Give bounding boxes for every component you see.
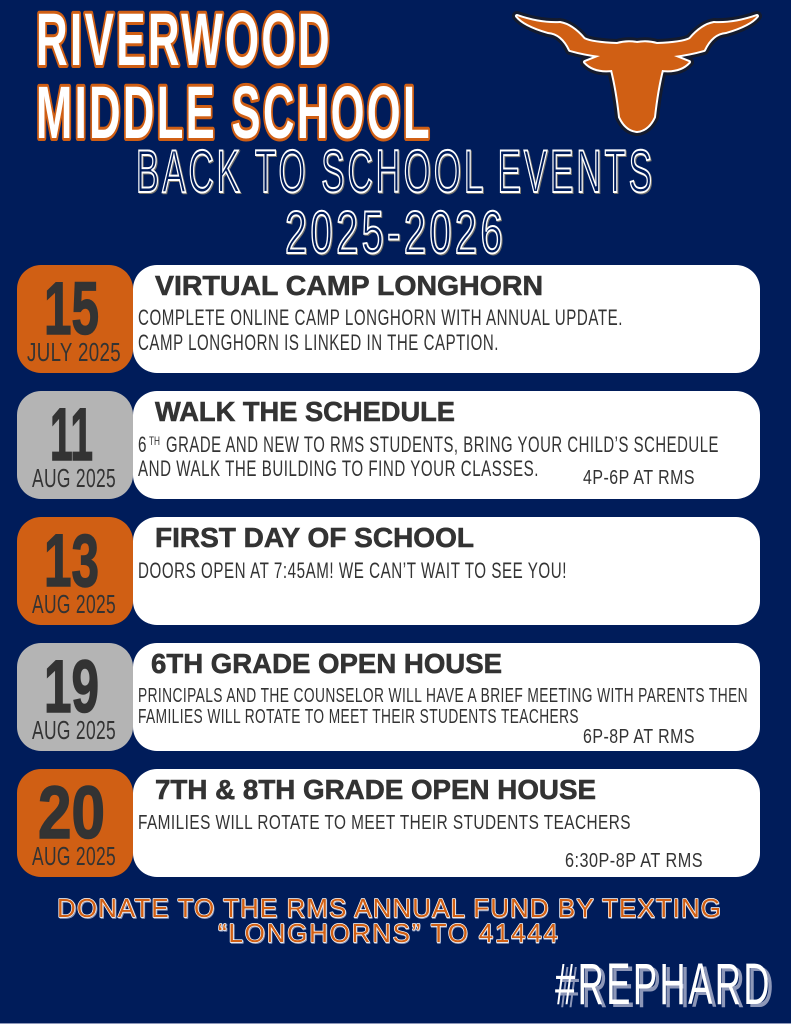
- panel: virtual camp longhorn: VIRTUAL CAMP LONGHORN: [155, 270, 543, 301]
- panel: first day of school: FIRST DAY OF SCHOOL: [155, 522, 474, 553]
- panel: 7th and 8th grade open house: [17, 769, 760, 877]
- panel: first day of school: DOORS OPEN AT 7:45AM! WE CAN’T WAIT TO SEE YOU!: [138, 558, 567, 583]
- panel: 7th and 8th grade open house: FAMILIES WILL ROTATE TO MEET THEIR STUDENTS TEACHERS: [138, 812, 631, 834]
- panel: 6th grade open house: FAMILIES WILL ROTATE TO MEET THEIR STUDENTS TEACHERS: [138, 706, 579, 728]
- title: school name: [36, 0, 432, 154]
- panel: 6th grade open house: AUG 2025: [32, 715, 116, 745]
- panel: virtual camp longhorn: [17, 265, 760, 373]
- panel: 6th grade open house: 6TH GRADE OPEN HOUSE: [151, 648, 502, 679]
- title: school name: MIDDLE SCHOOL: [36, 71, 432, 154]
- panel: virtual camp longhorn: 15: [44, 267, 99, 350]
- panel: walk the schedule: 11: [50, 393, 93, 476]
- panel: walk the schedule: WALK THE SCHEDULE: [155, 396, 455, 427]
- panel: virtual camp longhorn: CAMP LONGHORN IS LINKED IN THE CAPTION.: [138, 330, 499, 355]
- panel: 7th and 8th grade open house: 7TH & 8TH GRADE OPEN HOUSE: [155, 774, 596, 805]
- panel: 7th and 8th grade open house: 20: [38, 771, 105, 854]
- panel: 7th and 8th grade open house: AUG 2025: [32, 841, 116, 871]
- heading: back to school events: 2025-2026: [286, 200, 507, 267]
- icon: longhorn logo: [517, 16, 757, 131]
- panel: 6th grade open house: 19: [44, 645, 99, 728]
- heading: back to school events: 2025-2026: [285, 199, 506, 266]
- panel: first day of school: [17, 517, 760, 625]
- callout: donate to annual fund: [57, 893, 721, 949]
- panel: walk the schedule: AND WALK THE BUILDING TO FIND YOUR CLASSES.: [138, 456, 539, 481]
- panel: virtual camp longhorn: JULY 2025: [27, 337, 121, 367]
- panel: walk the schedule: TH: [149, 434, 160, 448]
- panel: 6th grade open house: [17, 643, 760, 751]
- panel: first day of school: 13: [44, 519, 99, 602]
- panel: walk the schedule: 6: [138, 432, 147, 457]
- panel: first day of school: AUG 2025: [32, 589, 116, 619]
- title: school name: RIVERWOOD: [36, 0, 332, 81]
- panel: walk the schedule: [17, 391, 760, 499]
- panel: 6th grade open house: 6P-8P AT RMS: [583, 726, 695, 748]
- callout: donate to annual fund: “LONGHORNS” TO 41444: [219, 919, 558, 949]
- heading: back to school events: [136, 138, 656, 267]
- panel: walk the schedule: AUG 2025: [32, 463, 116, 493]
- panel: 7th and 8th grade open house: 6:30P-8P AT RMS: [565, 850, 703, 872]
- callout: donate to annual fund: DONATE TO THE RMS ANNUAL FUND BY TEXTING: [58, 894, 721, 924]
- callout: donate to annual fund: DONATE TO THE RMS ANNUAL FUND BY TEXTING: [57, 893, 721, 923]
- callout: donate to annual fund: “LONGHORNS” TO 41444: [218, 918, 558, 948]
- panel: walk the schedule: 4P-6P AT RMS: [583, 467, 695, 489]
